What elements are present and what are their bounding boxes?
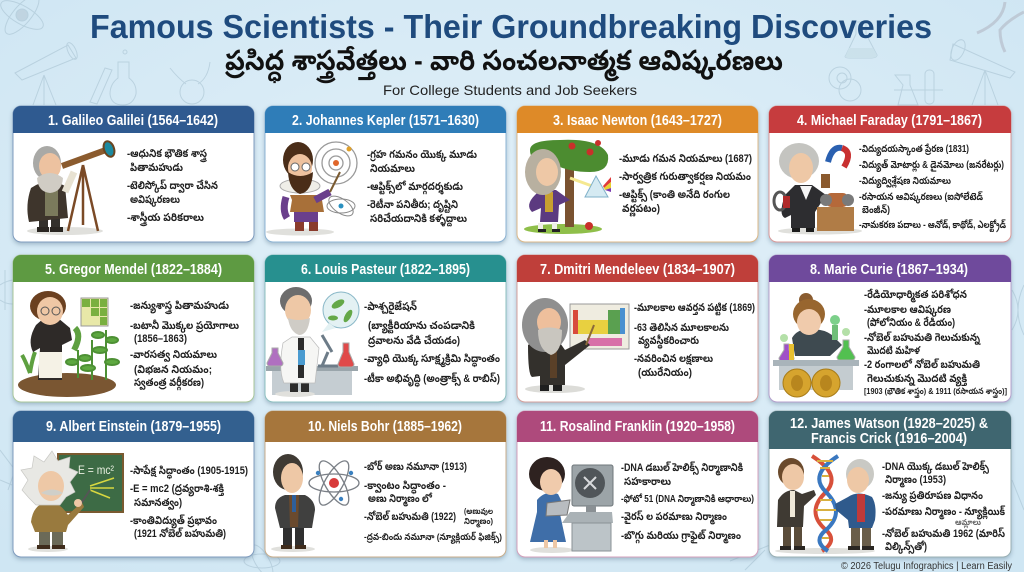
text block	[859, 143, 1006, 233]
text block	[130, 464, 248, 540]
panel: Albert Einstein	[13, 411, 254, 557]
panel: Marie Curie	[769, 255, 1011, 402]
text block: సహకారాలు	[624, 476, 671, 488]
text block: -నోబెల్ బహుమతి (1922)	[364, 510, 456, 523]
text block: -మూలకాల ఆవిష్కరణ	[864, 304, 951, 317]
text block: సరిచేయదానికి కళ్ళద్దాలు	[370, 212, 467, 227]
text block	[619, 153, 752, 217]
text block: వ్యవస్థీకరించారు	[638, 334, 699, 350]
icon: Curie with flasks and medals	[773, 293, 859, 397]
text block: -టీకా అభివృద్ధి (అంత్రాక్స్ & రాబిస్)	[364, 372, 500, 388]
icon: Bohr with atom	[271, 454, 359, 552]
text block: నియమాలు	[370, 163, 415, 175]
icon: Franklin with X-ray monitor	[529, 457, 613, 553]
heading: Francis Crick (1916–2004)	[811, 431, 967, 447]
icon: Watson, Crick and DNA helix	[775, 456, 876, 554]
heading: 2. Johannes Kepler (1571–1630)	[292, 113, 479, 129]
text block: -వైరస్ ల పరమాణు నిర్మాణం	[621, 510, 727, 525]
heading: 4. Michael Faraday (1791–1867)	[797, 113, 982, 129]
panel: Gregor Mendel	[13, 255, 254, 402]
text block: -ద్రవ-బిందు నమూనా (న్యూక్లియర్ ఫిజిక్స్)	[364, 531, 502, 544]
text block: -విద్యుద్విశ్లేషణ నియమాలు	[859, 175, 951, 189]
text block: -63 తెలిసిన మూలకాలను	[634, 322, 729, 334]
text block: (విభజన నియమం;	[134, 364, 212, 376]
heading	[790, 416, 988, 447]
text block: -2 రంగాలలో నోబెల్ బహుమతి	[864, 358, 980, 371]
text block: -వ్యాధి యొక్క సూక్ష్మక్రిమి సిద్ధాంతం	[364, 353, 500, 368]
heading: 6. Louis Pasteur (1822–1895)	[301, 262, 470, 278]
text block: -రేడియోధార్మికత పరిశోధన	[864, 288, 967, 303]
text block: -సాపేక్ష సిద్ధాంతం (1905-1915)	[130, 464, 248, 480]
panel: Louis Pasteur	[265, 255, 506, 402]
text block: -క్వాంటం సిద్ధాంతం -	[364, 480, 446, 495]
text block: వర్ణపటం)	[622, 203, 660, 217]
text block	[634, 302, 755, 379]
text block: పితామహుడు	[130, 162, 183, 174]
text block: -బోర్ అణు నమూనా (1913)	[364, 460, 467, 473]
text block: ద్రవాలను వేడి చేయడం)	[367, 334, 460, 348]
text block	[364, 460, 502, 544]
panel: Johannes Kepler	[265, 106, 506, 242]
text block: (బ్యాక్టీరియాను చంపడానికి	[368, 319, 475, 334]
icon: Mendeleev with periodic table	[522, 298, 629, 393]
text block: నిర్మాణం (1953)	[885, 474, 946, 488]
text block: -శాస్త్రీయ పరికరాలు	[127, 211, 204, 227]
text block: -గ్రహ గమనం యొక్క మూడు	[367, 149, 477, 162]
Telugu subtitle: ప్రసిద్ధ శాస్త్రవేత్తలు - వారి సంచలనాత్మక ఆవిష్కరణలు	[225, 45, 783, 84]
heading: 5. Gregor Mendel (1822–1884)	[45, 262, 222, 278]
panel: Michael Faraday	[769, 106, 1011, 242]
icon: Faraday with magnet and coil	[774, 143, 862, 234]
icon: Galileo with telescope	[27, 140, 116, 235]
text block: -రసాయన ఆవిష్కరణలు (ఐసోలేటెడ్	[859, 191, 983, 204]
text block: (పోలోనియం & రేడియం)	[867, 316, 955, 329]
icon: Einstein at chalkboard: E = mc²	[78, 463, 114, 477]
text block: బెంజీన్)	[862, 204, 890, 216]
heading: 9. Albert Einstein (1879–1955)	[46, 419, 221, 435]
text block: సమానత్వం)	[134, 497, 182, 510]
text block: స్వతంత్ర వర్గీకరణ)	[134, 376, 204, 391]
title: Famous Scientists - Their Groundbreaking Discoveries	[90, 8, 932, 45]
text block	[127, 148, 218, 227]
text block: విల్కిన్స్‌తో)	[885, 540, 927, 554]
text block: -ఫోటో 51 (DNA నిర్మాణానికి ఆధారాలు)	[621, 493, 754, 507]
text block	[364, 300, 500, 388]
text block: -బటానీ మొక్కల ప్రయోగాలు	[130, 319, 239, 333]
text block: -పాశ్చరైజేషన్	[364, 300, 417, 314]
text block: (యురేనియం)	[638, 366, 692, 379]
text block: (అణువుల	[464, 506, 493, 516]
heading: 12. James Watson (1928–2025) &	[790, 416, 988, 432]
panel: Niels Bohr	[265, 411, 506, 557]
heading: 8. Marie Curie (1867–1934)	[810, 262, 968, 278]
text block: -ఆప్టిక్స్‌లో మార్గదర్శకుడు	[367, 180, 463, 195]
heading: 7. Dmitri Mendeleev (1834–1907)	[540, 262, 735, 278]
tagline: For College Students and Job Seekers	[383, 82, 637, 98]
heading: 3. Isaac Newton (1643–1727)	[553, 113, 722, 129]
text block: -నవరించిన లక్షణాలు	[634, 353, 713, 365]
text block: -విద్యుదయస్కాంత ప్రేరణ (1831)	[859, 143, 969, 157]
text block: -మూలకాల ఆవర్తన పట్టిక (1869)	[634, 302, 755, 316]
text block	[864, 288, 1007, 399]
heading: 1. Galileo Galilei (1564–1642)	[48, 113, 218, 129]
text block: -మూడు గమన నియమాలు (1687)	[619, 153, 752, 165]
text block	[621, 461, 754, 544]
text block	[367, 149, 477, 227]
text block	[882, 460, 1005, 554]
icon: Kepler with orbits	[266, 142, 357, 236]
text block: -రెటీనా పనితీరు; దృష్టిని	[367, 198, 458, 213]
text block: గెలుచుకున్న మొదటి వ్యక్తి	[867, 373, 967, 387]
text block: -నోబెల్ బహుమతి గెలుచుకున్న	[864, 331, 981, 345]
icon: Pasteur in lab	[266, 287, 359, 397]
icon: Einstein at chalkboard	[21, 451, 123, 552]
text block: (1921 నోబెల్ బహుమతి)	[134, 527, 226, 540]
panel: Watson and Crick	[769, 411, 1011, 557]
text block: నిర్మాణం)	[464, 516, 493, 528]
panel: Rosalind Franklin	[517, 411, 758, 557]
text block: -E = mc2 (ద్రవ్యరాశి-శక్తి	[130, 483, 224, 497]
panel: Isaac Newton	[517, 106, 758, 242]
text block: -ఆధునిక భౌతిక శాస్త్ర	[127, 148, 207, 163]
text block: -జన్యుశాస్త్ర పితామహుడు	[130, 300, 229, 315]
text block: మొదటి మహిళ	[867, 345, 921, 357]
text block: -బొగ్గు మరియు గ్రాఫైట్ నిర్మాణం	[621, 529, 741, 544]
text block: ఆమ్లాలు	[955, 517, 981, 529]
text block: (1856–1863)	[134, 333, 187, 345]
icon: Mendel with pea plants	[18, 291, 119, 397]
heading: 11. Rosalind Franklin (1920–1958)	[540, 419, 735, 435]
text block: -ఆప్టిక్స్ (కాంతి అనేది రంగుల	[619, 188, 730, 203]
text block: -DNA డబుల్ హెలిక్స్ నిర్మాణానికి	[621, 461, 743, 476]
text block: -టెలిస్కోప్ ద్వారా చేసిన	[127, 179, 218, 193]
text block: అణు నిర్మాణం లో	[368, 492, 433, 507]
footer credit: © 2026 Telugu Infographics | Learn Easily	[841, 561, 1012, 572]
text block: -కాంతివిద్యుత్ ప్రభావం	[130, 514, 217, 529]
text block: -జన్యు ప్రతిరూపణ విధానం	[882, 490, 983, 504]
panel: Dmitri Mendeleev	[517, 255, 758, 402]
icon: Newton with apple tree and prism	[524, 140, 611, 234]
text block: -సార్వత్రిక గురుత్వాకర్షణ నియమం	[619, 171, 751, 186]
text block	[130, 300, 239, 391]
panel: Galileo Galilei	[13, 106, 254, 242]
text block: అవిష్కరణలు	[130, 194, 180, 207]
text block: -వారసత్వ నియమాలు	[130, 349, 217, 362]
text block: -DNA యొక్క డబుల్ హెలిక్స్	[882, 460, 989, 474]
heading: 10. Niels Bohr (1885–1962)	[308, 419, 462, 435]
